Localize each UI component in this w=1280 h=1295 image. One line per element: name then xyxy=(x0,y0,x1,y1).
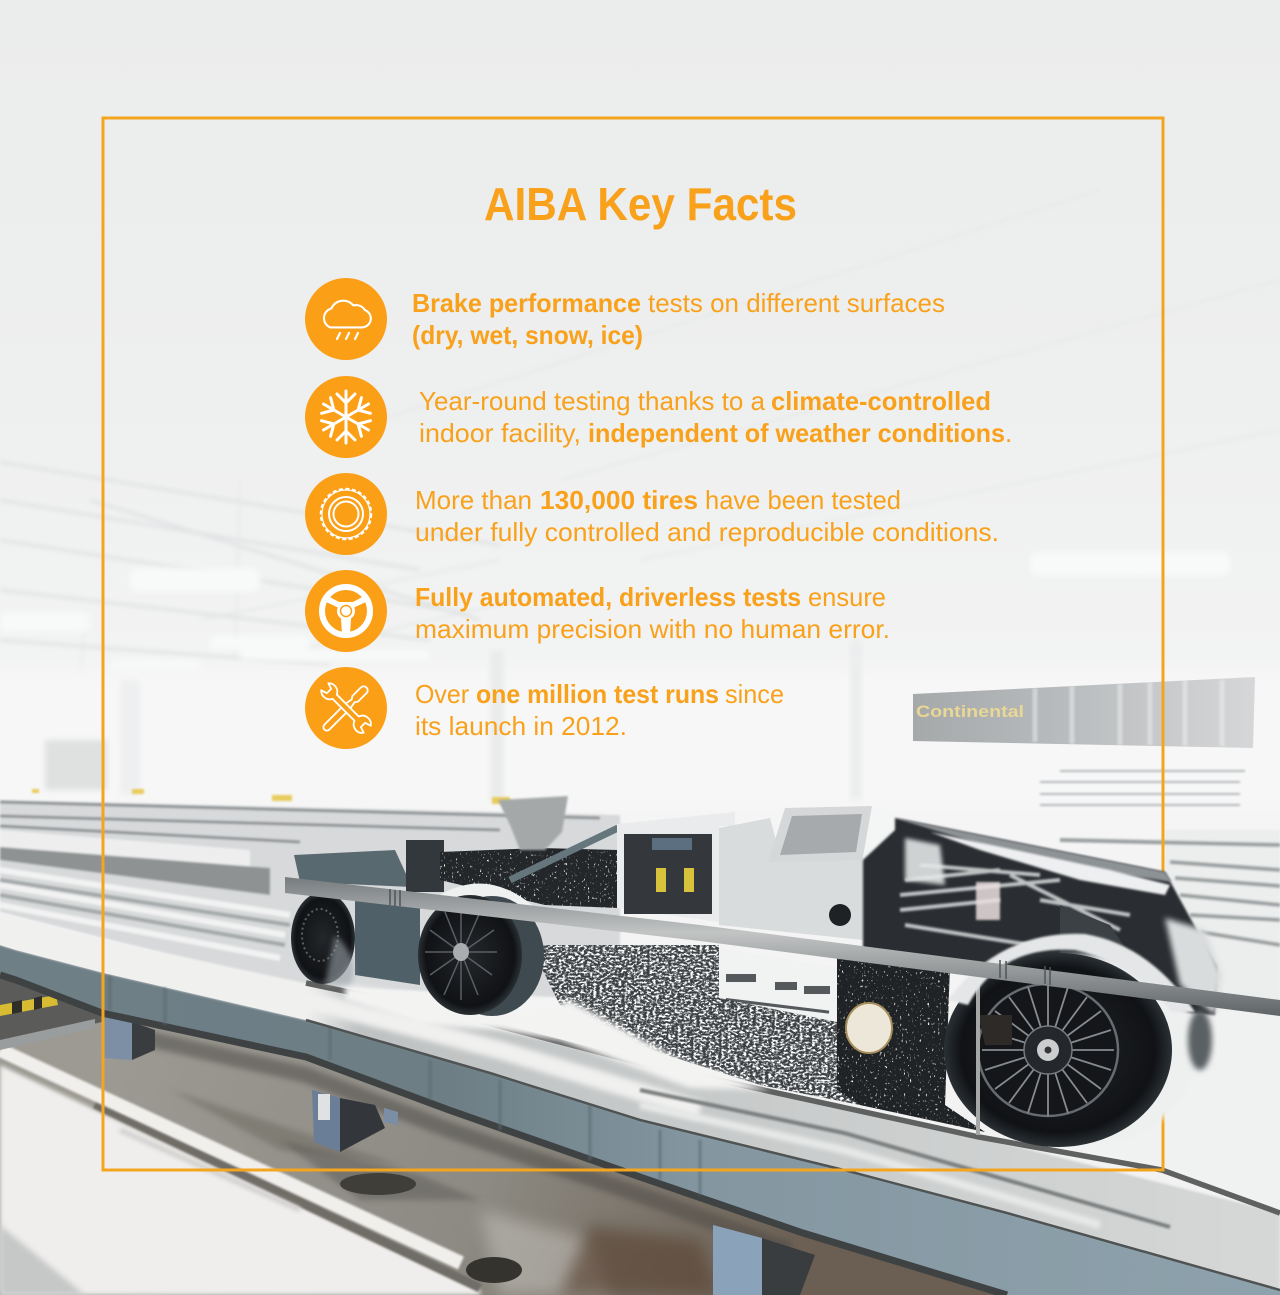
handrail xyxy=(285,877,1280,1016)
splash zone right xyxy=(837,955,985,1132)
control box xyxy=(617,812,735,922)
text: test runs: its launch in 2012. xyxy=(415,711,627,741)
text: test runs: Over xyxy=(415,679,469,709)
fact 2: year-round testing xyxy=(305,376,1012,458)
hall ceiling streaks xyxy=(0,190,1280,690)
text: tires tested: under fully controlled and reproducible conditions. xyxy=(415,517,999,547)
front wheel xyxy=(944,934,1212,1147)
hazard bar and machinery xyxy=(0,975,102,1050)
hall wall and columns xyxy=(0,640,1280,805)
icon: tire xyxy=(305,473,387,555)
text: tires tested: 130,000 tires xyxy=(540,485,698,515)
text: tires tested: have been tested xyxy=(705,485,901,515)
icon: snowflake xyxy=(305,376,387,458)
rear chassis and mudguard xyxy=(294,796,618,985)
text: year-round testing: . xyxy=(1005,418,1012,448)
orange frame xyxy=(103,118,1163,1170)
middle wheel xyxy=(418,895,544,1016)
front body frame xyxy=(863,818,1222,1015)
title: AIBA Key Facts xyxy=(484,178,797,230)
fact 5: test runs xyxy=(305,667,784,749)
text: tires tested: More than xyxy=(415,485,532,515)
text: automated tests: Fully automated, driverless tests xyxy=(415,582,801,612)
Continental banner: Continental xyxy=(916,702,1024,721)
text: brake performance: tests on different surfaces xyxy=(648,288,945,318)
track supports xyxy=(104,1015,815,1295)
text: year-round testing: climate-controlled xyxy=(771,386,991,416)
text: brake performance: Brake performance xyxy=(412,288,641,318)
rear shutter xyxy=(1040,771,1245,805)
text: test runs: one million test runs xyxy=(476,679,719,709)
text: brake performance: (dry, wet, snow, ice) xyxy=(412,320,643,350)
text: test runs: since xyxy=(725,679,784,709)
right side lanes xyxy=(1060,830,1280,1020)
icon: wrench and screwdriver xyxy=(305,667,387,749)
text: year-round testing: Year-round testing thanks to a xyxy=(419,386,766,416)
background track lanes xyxy=(0,800,620,1000)
ceiling lights xyxy=(0,552,1230,670)
rear wheel xyxy=(291,892,355,985)
text: automated tests: ensure xyxy=(808,582,886,612)
icon: steering wheel xyxy=(305,570,387,652)
water spray near middle wheel xyxy=(345,985,770,1090)
fact 1: brake performance xyxy=(305,278,945,360)
fact 3: tires tested xyxy=(305,473,999,555)
test track beam xyxy=(0,913,1280,1295)
splash zone left xyxy=(530,945,960,1125)
icon: rain cloud xyxy=(305,278,387,360)
text: year-round testing: independent of weather conditions xyxy=(588,418,1005,448)
floor xyxy=(0,975,1007,1295)
test vehicle xyxy=(285,796,1280,1147)
Continental banner xyxy=(913,677,1255,748)
text: year-round testing: indoor facility, xyxy=(419,418,581,448)
central white panels xyxy=(719,818,863,1022)
floor light reflections xyxy=(0,1030,790,1295)
touch screen xyxy=(768,806,895,862)
fact 4: automated tests xyxy=(305,570,890,652)
text: automated tests: maximum precision with no human error. xyxy=(415,614,890,644)
white spray right of the front wheel xyxy=(1090,1010,1280,1208)
